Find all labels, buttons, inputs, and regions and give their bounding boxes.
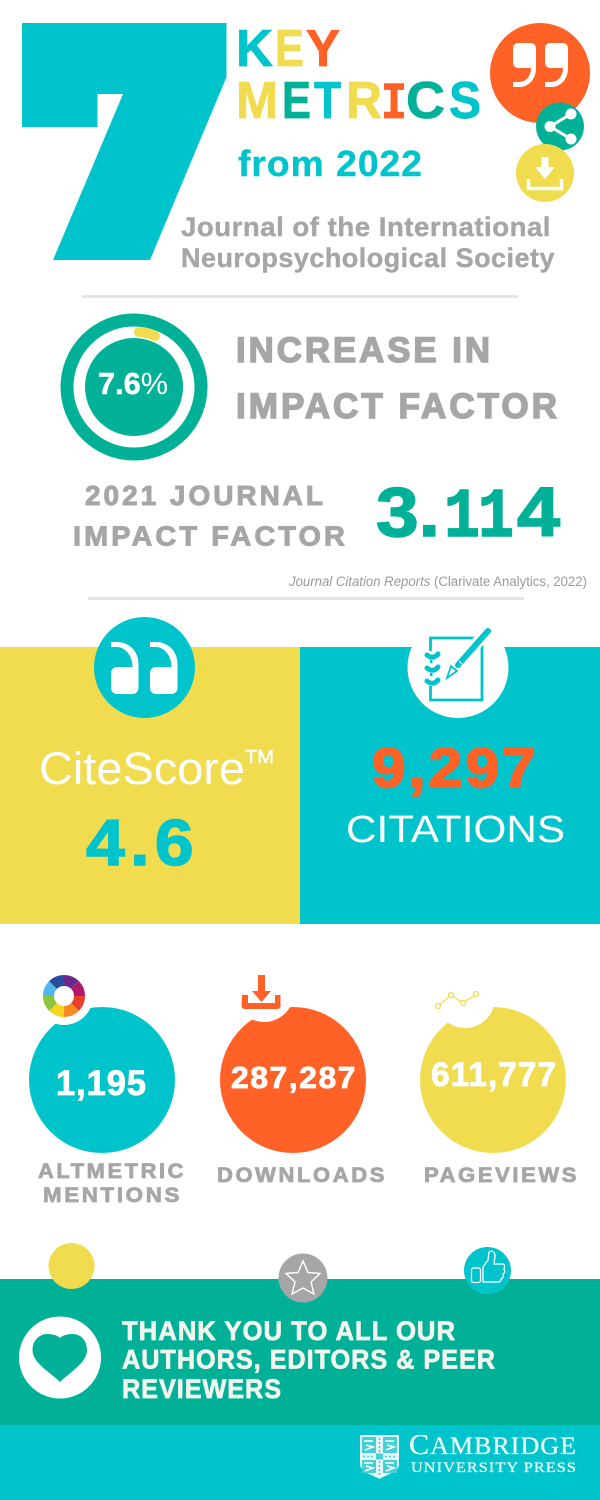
heading: increase in impact factor — [236, 331, 560, 426]
title: key metrics: K — [236, 20, 273, 78]
value: 4.6: 4.6 — [86, 806, 199, 879]
metric: downloads — [217, 962, 387, 1187]
thank you message — [122, 1316, 496, 1404]
thank you message: THANK YOU TO ALL OUR — [122, 1316, 456, 1346]
metric: pageviews — [420, 968, 579, 1187]
label: altmetric mentions: ALTMETRIC — [38, 1160, 186, 1183]
icon: download — [242, 975, 280, 1009]
icon: share circle — [536, 102, 584, 150]
icon: yellow dot — [48, 1243, 94, 1289]
journal name: Neuropsychological Society — [181, 243, 555, 273]
big numeral 7 — [22, 23, 226, 260]
value: 287,287: 287,287 — [231, 1060, 357, 1095]
panel: citescore — [0, 617, 300, 924]
thank you message: REVIEWERS — [122, 1374, 282, 1404]
journal name: Journal of the International — [181, 212, 551, 242]
source note: Journal Citation Reports (Clarivate Analytics, 2022) — [288, 574, 587, 589]
title: key metrics: R — [346, 72, 382, 130]
logo: cambridge university press wordmark — [409, 1429, 577, 1476]
title: key metrics: I — [381, 75, 407, 134]
donut: 7.6% increase — [67, 320, 201, 454]
journal name — [181, 212, 555, 273]
icon: line chart — [436, 992, 478, 1008]
label: citescore: CiteScore — [39, 743, 245, 794]
label: citations: CITATIONS — [346, 809, 565, 851]
icon: notebook and pencil — [408, 617, 508, 718]
label: downloads: DOWNLOADS — [217, 1164, 387, 1187]
heading: increase in impact factor: INCREASE IN — [236, 331, 493, 370]
value: 3.114: 4 — [517, 473, 560, 551]
icon: altmetric donut — [48, 980, 80, 1012]
label: altmetric mentions: MENTIONS — [43, 1184, 182, 1207]
label: 2021 journal impact factor: IMPACT FACTOR — [73, 520, 348, 552]
icon: download circle — [516, 144, 574, 202]
value: 3.114: 1 — [444, 479, 480, 558]
heading: increase in impact factor: IMPACT FACTOR — [236, 387, 560, 426]
label: 2021 journal impact factor: 2021 JOURNAL — [85, 480, 326, 511]
value: 3.114: 1 — [478, 479, 514, 558]
panel: citations — [300, 617, 600, 924]
metric: altmetric mentions — [29, 967, 186, 1207]
icon: heart — [19, 1316, 101, 1398]
title: key metrics: T — [314, 72, 341, 130]
panel: thank you banner — [0, 1243, 600, 1425]
title: key metrics: C — [406, 72, 445, 130]
value: 611,777: 611,777 — [431, 1056, 557, 1094]
title: key metrics — [236, 20, 481, 134]
logo: cambridge shield — [360, 1435, 399, 1479]
value: 9,297: 9,297 — [372, 736, 539, 799]
icon: orange quote circle — [490, 23, 590, 123]
label: altmetric mentions — [38, 1160, 186, 1207]
logo: cambridge university press wordmark: UNIVERSITY PRESS — [411, 1460, 577, 1476]
label: pageviews: PAGEVIEWS — [424, 1164, 579, 1187]
title: key metrics: E — [275, 20, 304, 78]
title: key metrics: S — [449, 72, 481, 130]
thank you message: AUTHORS, EDITORS & PEER — [122, 1344, 496, 1374]
subtitle: from 2022: from 2022 — [238, 143, 423, 184]
icon: thumbs up badge — [464, 1247, 511, 1294]
panel: footer — [0, 1425, 600, 1500]
value: 3.114 — [376, 473, 560, 558]
value: 3.114: 3. — [376, 473, 440, 551]
title: key metrics: M — [236, 72, 278, 130]
title: key metrics: Y — [306, 20, 340, 78]
donut: 7.6% increase: 7.6% — [98, 366, 168, 401]
icon: citescore quote — [94, 617, 195, 718]
value: 1,195: 1,195 — [56, 1064, 147, 1103]
label: 2021 journal impact factor — [73, 480, 348, 552]
icon: star badge — [278, 1254, 328, 1302]
trademark: TM — [245, 747, 274, 767]
logo: cambridge university press wordmark: CAMBRIDGE — [409, 1429, 577, 1461]
title: key metrics: E — [282, 72, 311, 130]
